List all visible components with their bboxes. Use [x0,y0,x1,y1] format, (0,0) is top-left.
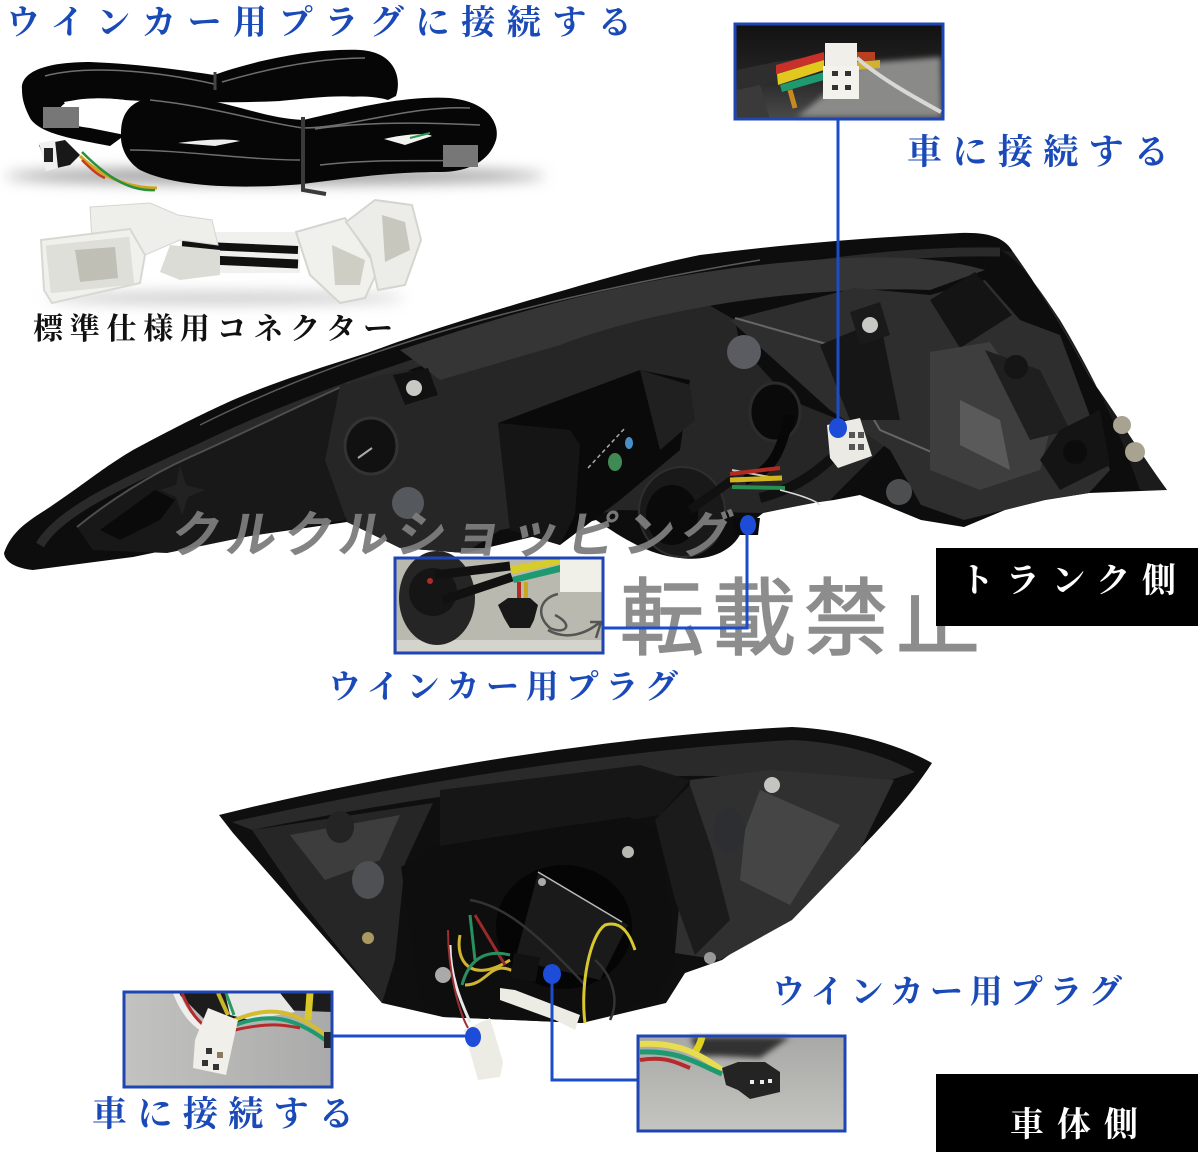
caption: connect to car: 車に接続する [907,133,1169,172]
watermark: shop name [160,465,737,563]
label: trunk side [936,548,1198,626]
watermark: shop name: クルクルショッピング [167,506,737,563]
inset photo: connect to car [735,24,943,120]
callout dot and line: body connector [332,1027,481,1047]
upper tail lamp (trunk side) [4,233,1167,570]
inset photo: body connector [124,992,332,1087]
caption: connect to car (body side): 車に接続する [92,1095,354,1134]
label: body side [936,1074,1198,1152]
callout line: car connector [829,120,847,438]
caption: turn signal plug: ウインカー用プラグ [328,669,678,706]
inset photo: turn signal plug [395,551,603,653]
label: body side: 車体側 [1010,1106,1138,1144]
inset photo: body turn plug [638,1036,845,1131]
callout line: turn signal plug [604,515,756,628]
lower tail lamp (body side) [219,727,932,1080]
white standard connector photo [41,200,421,304]
label: trunk side: トランク側 [960,562,1176,600]
caption: turn signal plug (body side): ウインカー用プラグ [772,974,1122,1011]
callout dot and line: body turn plug [543,964,637,1080]
caption: standard spec connector: 標準仕様用コネクター [33,313,393,346]
title: connect to turn signal plug: ウインカー用プラグに接続する [6,4,632,42]
wiring harness photo [5,50,545,194]
watermark: no reproduction: 転載禁止 [620,572,980,666]
